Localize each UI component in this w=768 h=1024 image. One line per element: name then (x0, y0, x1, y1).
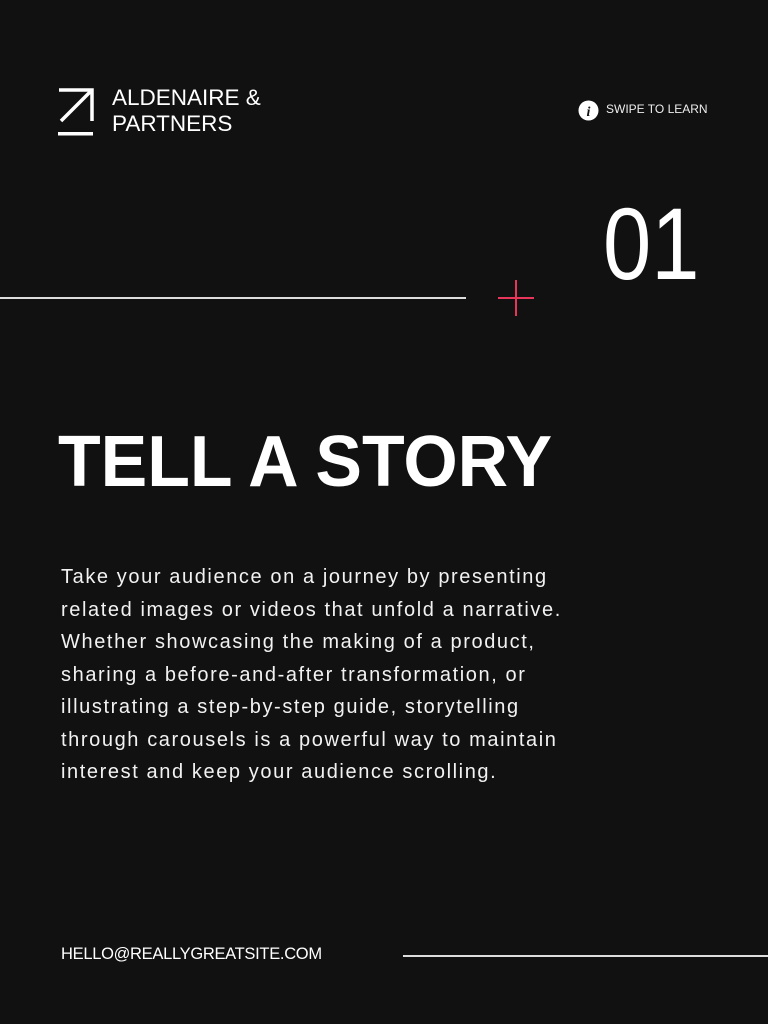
icon: info: i (587, 105, 591, 120)
footer email: HELLO@REALLYGREATSITE.COM (61, 945, 322, 963)
body text: interest and keep your audience scrolling. (61, 761, 497, 783)
brand name: PARTNERS (112, 111, 232, 136)
body text: Whether showcasing the making of a product, (61, 631, 536, 653)
brand name (112, 85, 261, 136)
divider line (0, 297, 466, 298)
icon: logo mark (58, 88, 94, 136)
brand name: ALDENAIRE & (112, 85, 261, 110)
body text: sharing a before-and-after transformation, or (61, 664, 527, 686)
swipe text: SWIPE TO LEARN (606, 102, 708, 116)
logo (58, 85, 261, 136)
footer line (403, 955, 768, 956)
number 01: 01 (603, 187, 699, 301)
icon: info (578, 100, 598, 120)
title: TELL A STORY (58, 422, 552, 502)
body text: through carousels is a powerful way to maintain (61, 728, 558, 750)
body text: illustrating a step-by-step guide, storytelling (61, 696, 520, 718)
swipe hint (578, 100, 708, 120)
body text: Take your audience on a journey by presenting (61, 566, 548, 588)
body text (61, 566, 562, 783)
icon: red cross (498, 280, 534, 316)
body text: related images or videos that unfold a narrative. (61, 598, 562, 620)
